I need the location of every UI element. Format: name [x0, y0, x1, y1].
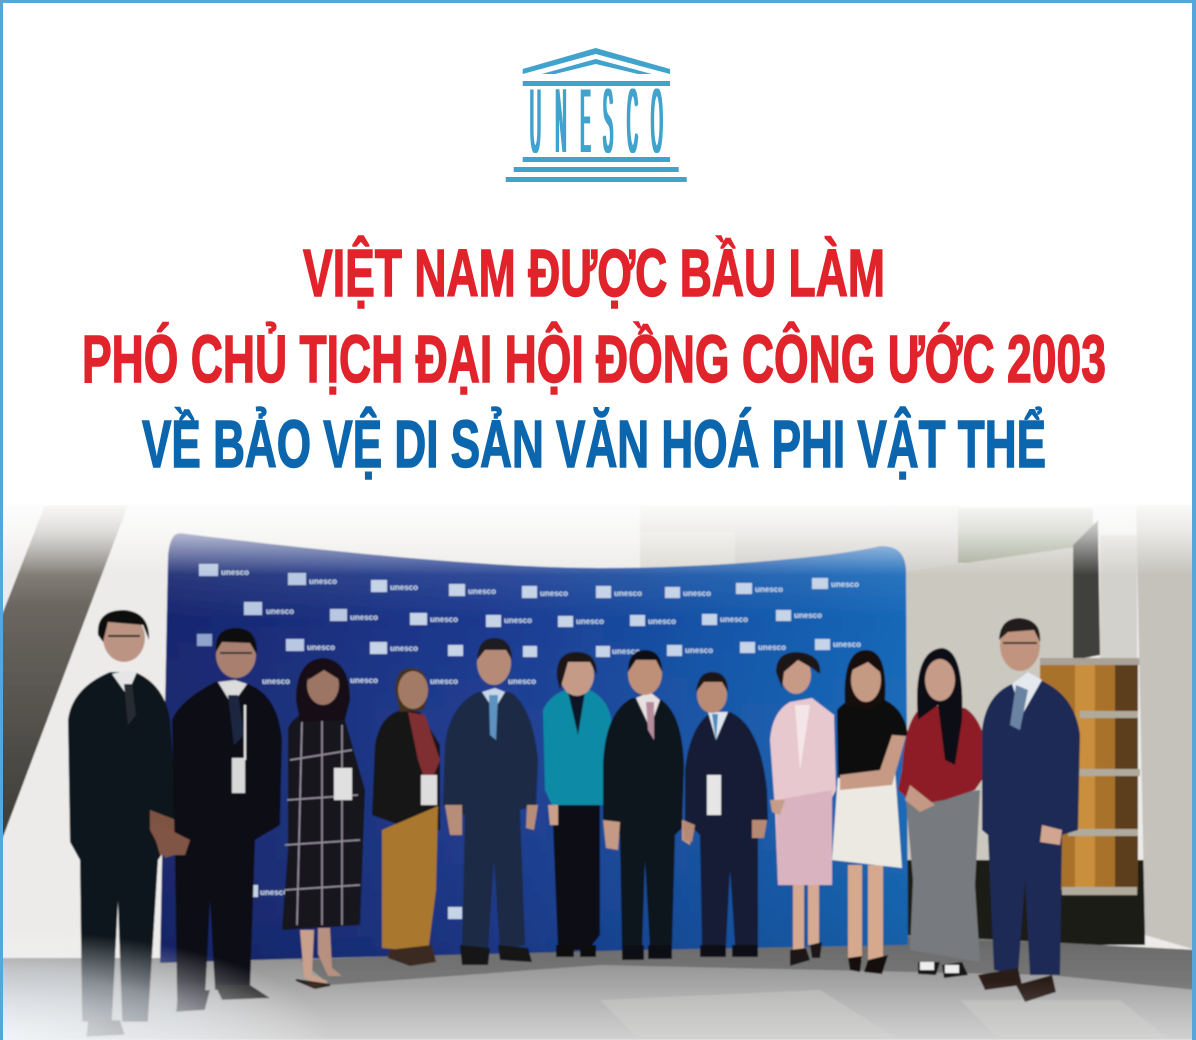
- photo: dark recess: [905, 860, 1145, 945]
- photo: backdrop logo pattern: unesco: [612, 647, 640, 656]
- person 3: woman in plaid dress: [282, 658, 365, 988]
- title: [82, 236, 1106, 482]
- photo: backdrop logo pattern: unesco: [260, 888, 288, 897]
- photo: UNESCO backdrop: [160, 533, 908, 963]
- photo: concrete column right: [1136, 505, 1196, 950]
- photo: uneven floor shadow: [300, 937, 1196, 990]
- photo: concrete panel right: [903, 545, 1090, 940]
- photo: backdrop logo pattern: unesco: [758, 643, 786, 652]
- photo: foliage: [958, 508, 1093, 563]
- photo: backdrop logo pattern: unesco: [468, 587, 496, 596]
- logo temple roof: [523, 48, 670, 74]
- photo: bottom fade: [0, 980, 1196, 1040]
- person 2: man in black suit with lanyard: [150, 628, 282, 1012]
- logo beam and steps: [506, 81, 687, 182]
- photo: backdrop logo pattern: unesco: [262, 677, 290, 686]
- logo letters: [530, 70, 663, 172]
- logo letters: N: [556, 70, 566, 172]
- person 1: man in black suit: [68, 610, 190, 1037]
- photo: backdrop logo pattern: unesco: [430, 677, 458, 686]
- logo letters: C: [627, 70, 638, 172]
- photo: ceiling slabs: [640, 505, 960, 585]
- group photo: [0, 495, 1196, 1040]
- photo: backdrop logo pattern: [197, 564, 861, 919]
- photo: floor: [0, 935, 1196, 1040]
- logo letters: S: [603, 70, 613, 172]
- photo: backdrop logo pattern: unesco: [307, 643, 335, 652]
- photo: backdrop logo pattern: unesco: [794, 611, 822, 620]
- photo: backdrop logo pattern: unesco: [648, 617, 676, 626]
- photo: concrete block: [640, 532, 735, 572]
- photo: backdrop logo pattern: unesco: [350, 613, 378, 622]
- photo: dark doorway: [1073, 520, 1100, 660]
- photo: backdrop logo pattern: unesco: [576, 617, 604, 626]
- photo: backdrop logo pattern: unesco: [685, 646, 713, 655]
- person 4: woman with black jacket and tan trousers: [372, 668, 440, 966]
- photo: wooden shelf: [1040, 658, 1140, 895]
- photo: left diagonal pillar: [0, 505, 128, 845]
- photo: backdrop logo pattern: unesco: [390, 583, 418, 592]
- photo: backdrop logo pattern: unesco: [221, 568, 249, 577]
- photo: backdrop logo pattern: unesco: [720, 615, 748, 624]
- logo letters: O: [651, 70, 663, 172]
- photo: bottom-left fade: [0, 930, 330, 1040]
- photo: backdrop logo pattern: unesco: [755, 585, 783, 594]
- photo: backdrop logo pattern: unesco: [266, 607, 294, 616]
- photo: backdrop logo pattern: unesco: [309, 577, 337, 586]
- photo: floor paving patches: [600, 990, 1170, 1040]
- UNESCO logo: [506, 48, 687, 182]
- person 9: woman in pink suit: [770, 652, 836, 966]
- photo: backdrop logo pattern: unesco: [350, 676, 378, 685]
- photo: backdrop logo pattern: unesco: [540, 589, 568, 598]
- photo: backdrop logo pattern: unesco: [430, 615, 458, 624]
- title line 1: VIỆT NAM ĐƯỢC BẦU LÀM: [303, 236, 885, 311]
- person 11: woman in red cardigan and grey trousers: [898, 648, 990, 978]
- photo: right post: [1100, 535, 1137, 660]
- photo: backdrop logo pattern: unesco: [833, 640, 861, 649]
- photo: backdrop logo pattern: unesco: [831, 580, 859, 589]
- photo: top white fade: [0, 495, 1196, 575]
- logo letters: E: [580, 70, 591, 172]
- person 12: young man in blue suit: [978, 618, 1080, 1002]
- photo: backdrop logo pattern: unesco: [614, 589, 642, 598]
- person 6: woman in teal jacket: [543, 652, 612, 957]
- person 5: man in navy suit: [443, 638, 538, 965]
- photo: backdrop logo pattern: unesco: [504, 616, 532, 625]
- photo: backdrop logo pattern: unesco: [683, 589, 711, 598]
- person 7: man in black suit and pink tie: [603, 650, 692, 960]
- person 10: woman in black top and white skirt: [832, 650, 908, 974]
- photo: wall background: [0, 505, 1196, 1040]
- logo letters: U: [530, 70, 541, 172]
- photo: backdrop logo pattern: unesco: [390, 644, 418, 653]
- person 8: older man in navy suit: [683, 672, 768, 957]
- photo: backdrop logo pattern: unesco: [508, 677, 536, 686]
